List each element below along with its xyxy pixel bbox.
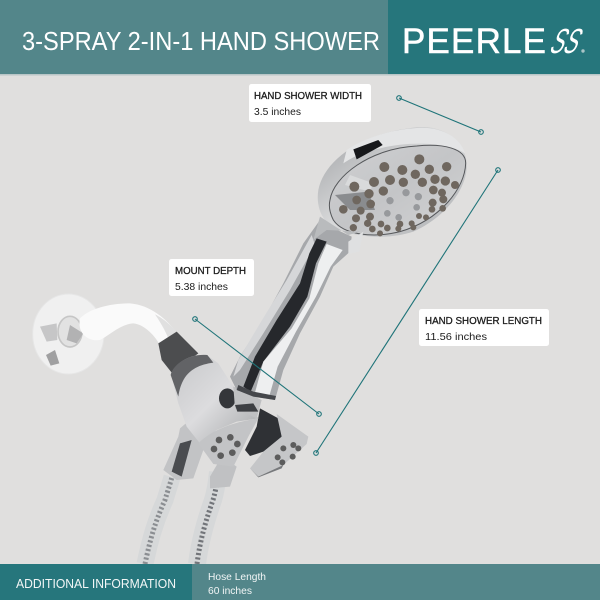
header band: logo: PEERLE — [402, 22, 546, 61]
dimension line: depth — [193, 317, 321, 416]
hose collars — [163, 418, 203, 480]
nozzles — [339, 154, 459, 236]
header band: logo — [388, 0, 600, 74]
footer: hose length: Hose Length — [208, 571, 266, 583]
footer: hose length — [192, 564, 600, 600]
illustration: hand shower handle — [230, 220, 352, 400]
dark coupling — [158, 332, 198, 373]
callout: hand shower width: HAND SHOWER WIDTH — [254, 90, 362, 102]
illustration: swivel mount and mount spray heads — [158, 332, 308, 488]
header band: product title: 3-SPRAY 2-IN-1 HAND SHOWER — [22, 26, 380, 56]
illustration: hoses — [145, 472, 218, 564]
callout: hand shower width — [249, 84, 371, 122]
dimension line: width — [397, 96, 483, 134]
mount body — [172, 355, 258, 443]
callout: hand shower length — [419, 309, 549, 346]
illustration: wall flange and shower arm — [33, 294, 178, 374]
right spray head — [250, 414, 308, 477]
footer: additional information label — [0, 564, 192, 600]
right spray backing — [245, 408, 285, 456]
callout: hand shower length: 11.56 inches — [425, 331, 487, 343]
left spray head — [198, 418, 258, 467]
callout: mount depth: MOUNT DEPTH — [175, 265, 246, 277]
callout: mount depth — [169, 259, 254, 296]
callout: hand shower width: 3.5 inches — [254, 106, 301, 118]
header band: product title — [0, 0, 388, 74]
dimension line: length — [314, 168, 500, 455]
illustration: hand shower head — [313, 127, 467, 254]
footer: additional information label: ADDITIONAL INFORMATION — [16, 576, 176, 591]
callout: hand shower length: HAND SHOWER LENGTH — [425, 315, 542, 327]
footer: hose length: 60 inches — [208, 585, 252, 597]
callout: mount depth: 5.38 inches — [175, 281, 228, 293]
